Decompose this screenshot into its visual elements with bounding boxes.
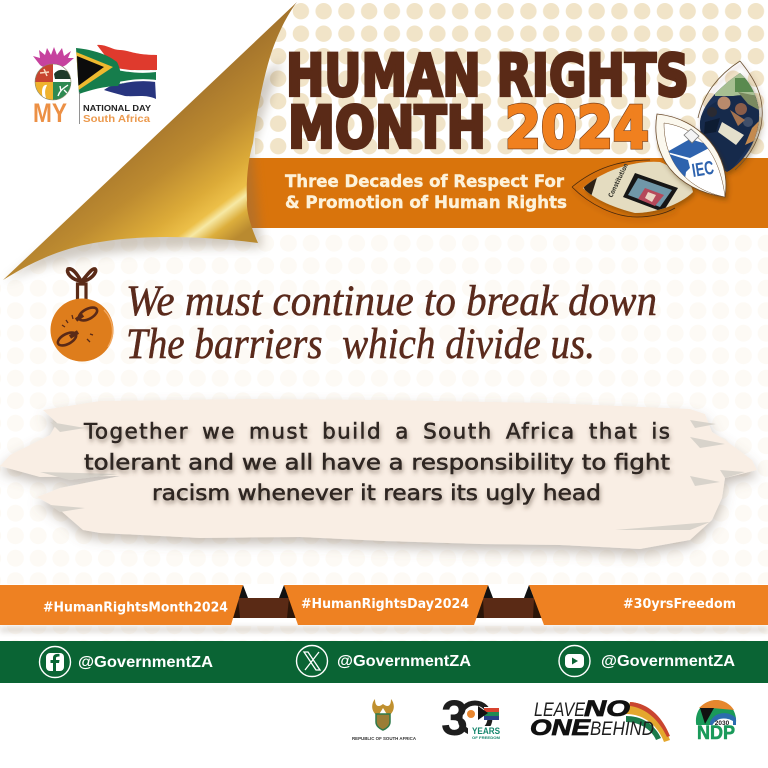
text: IEC: IEC <box>690 158 716 182</box>
footer logos <box>352 690 737 746</box>
ribbon: #HumanRightsMonth2024: #HumanRightsMonth2024 <box>43 600 228 616</box>
logo: coat of arms: REPUBLIC OF SOUTH AFRICA <box>352 736 416 741</box>
ribbon: #HumanRightsDay2024: #HumanRightsDay2024 <box>301 597 469 612</box>
logo: leave no one behind: LEAVE <box>534 700 585 721</box>
logo: MY National Day South Africa <box>33 45 157 128</box>
logo: 30 years of freedom: OF FREEDOM <box>472 735 501 740</box>
text: South Africa: South Africa <box>83 114 150 125</box>
logo: coat of arms <box>352 699 416 741</box>
title: 2024 <box>505 94 649 162</box>
panel: brush stroke message <box>0 399 757 549</box>
title <box>286 42 689 162</box>
quote heading <box>126 278 657 368</box>
logo: 30 years of freedom: 3 <box>441 690 468 746</box>
hashtag ribbons <box>0 585 768 632</box>
message text <box>83 420 670 506</box>
photo leaves <box>572 61 763 217</box>
icon: X <box>296 646 328 676</box>
message text: Together we must build a South Africa that is <box>83 420 670 444</box>
message text: tolerant and we all have a responsibility to fight <box>84 450 670 476</box>
text: X handle: @GovernmentZA <box>337 653 471 670</box>
leaf: constitution book <box>572 160 693 217</box>
logo: 30 years of freedom: YEARS <box>472 726 500 737</box>
social media band <box>0 641 768 683</box>
page curl <box>3 2 297 283</box>
ribbon: #30yrsFreedom: #30yrsFreedom <box>623 597 736 612</box>
logo: leave no one behind: NO <box>584 696 630 721</box>
text: The Constitution: Constitution <box>607 162 630 199</box>
text: MY: MY <box>33 98 67 128</box>
text: YouTube handle: @GovernmentZA <box>601 653 735 670</box>
logo: NDP 2030 <box>696 700 737 744</box>
quote heading: We must continue to break down <box>126 278 657 325</box>
icon: Facebook <box>40 646 70 678</box>
quote heading: The barriers which divide us. <box>126 321 595 368</box>
title: MONTH <box>288 94 486 162</box>
text: Facebook handle: @GovernmentZA <box>78 654 213 671</box>
subtitle band: & Promotion of Human Rights <box>285 193 567 213</box>
icon: protea flower crest <box>33 47 74 100</box>
leaf: IEC ballot box <box>656 114 726 197</box>
brush stroke shape <box>0 399 757 549</box>
logo: leave no one behind: ONE <box>530 715 592 740</box>
message text: racism whenever it rears its ugly head <box>152 481 601 506</box>
logo: leave no one behind <box>530 696 670 742</box>
icon: YouTube <box>559 646 590 676</box>
logo: NDP 2030: 2030 <box>715 720 730 727</box>
text: National Day: NATIONAL DAY <box>83 103 151 113</box>
ribbon connector left <box>231 585 296 618</box>
icon: South African flag <box>76 45 157 99</box>
subtitle band <box>240 158 768 228</box>
ribbon: #HumanRightsDay2024 <box>284 585 488 625</box>
title: 2024 <box>505 94 649 162</box>
ribbon connector right <box>475 585 543 618</box>
logo: leave no one behind: BEHIND <box>590 719 654 740</box>
leaf: crowd photo <box>698 61 763 172</box>
ribbon: #HumanRightsMonth2024 <box>0 585 243 625</box>
logo: NDP 2030: NDP <box>697 723 735 744</box>
logo: 30 years of freedom <box>441 690 502 746</box>
subtitle band: Three Decades of Respect For <box>285 172 565 192</box>
ribbon: #30yrsFreedom <box>529 585 768 625</box>
pendant icon: broken chain <box>50 269 114 362</box>
